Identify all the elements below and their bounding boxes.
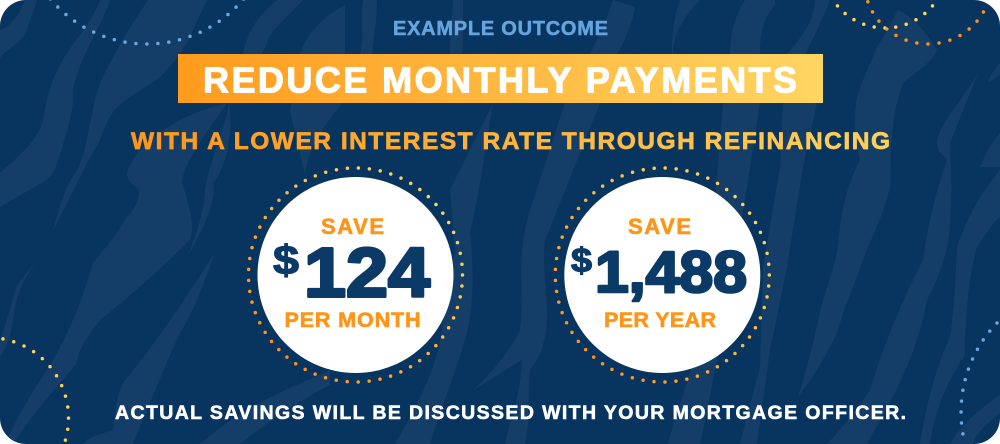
savings circle: per year: PER YEAR [604, 308, 716, 332]
dotted arc: top right orange [864, 0, 992, 44]
savings circle: per month: $ [273, 237, 299, 283]
dotted arc: bottom right blue [961, 323, 997, 444]
dotted arc: bottom left yellow [3, 339, 69, 444]
subtitle: WITH A LOWER INTEREST RATE THROUGH REFINANCING [131, 128, 890, 155]
savings circle: per year: 1,488 [595, 240, 747, 305]
footer disclaimer: ACTUAL SAVINGS WILL BE DISCUSSED WITH YOUR MORTGAGE OFFICER. [115, 402, 906, 424]
savings circle: per year [555, 168, 769, 382]
savings circle: per year: SAVE [628, 214, 691, 239]
savings circle: per month: SAVE [321, 214, 384, 239]
dotted arc: top left blue [49, 0, 245, 46]
dotted arc: top right yellow [836, 4, 934, 30]
title banner: REDUCE MONTHLY PAYMENTS [203, 60, 797, 100]
savings circle: per year: $ [571, 242, 592, 280]
savings circle: per month: 124 [304, 234, 430, 312]
savings circle: per month [248, 168, 462, 382]
savings circle: per month: PER MONTH [284, 308, 420, 332]
eyebrow heading: EXAMPLE OUTCOME [393, 18, 608, 40]
